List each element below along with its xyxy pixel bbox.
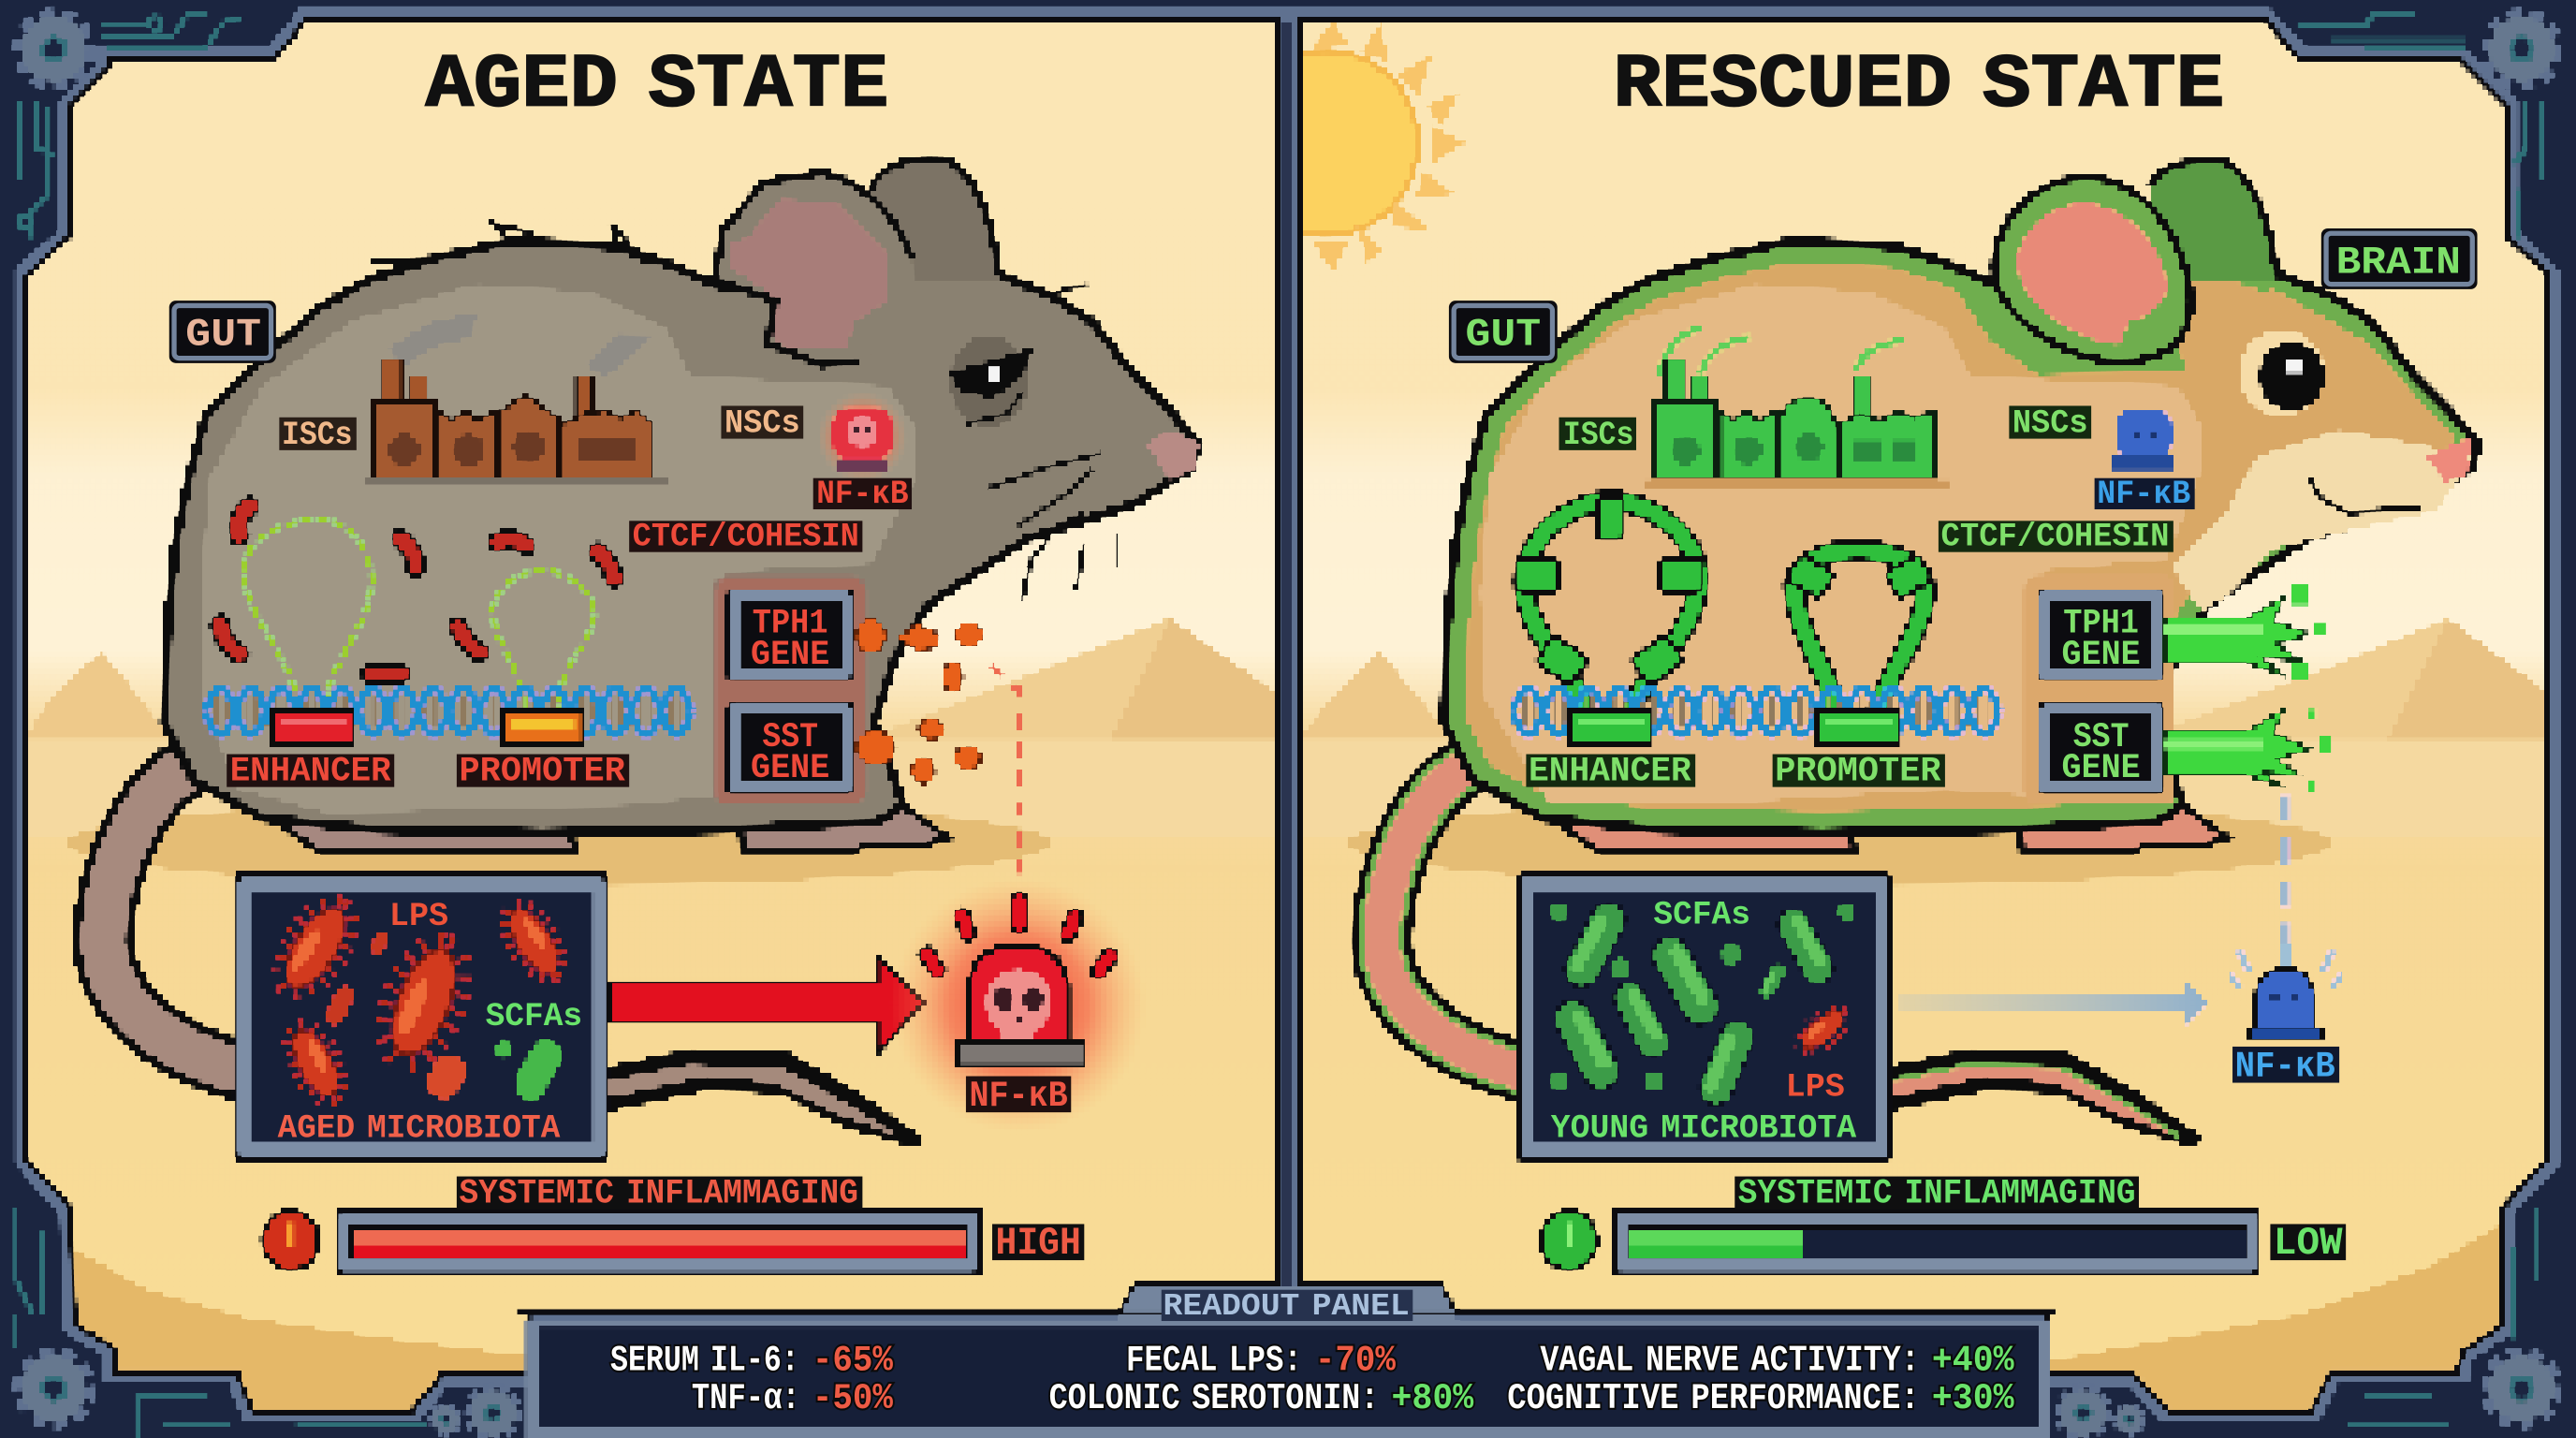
promoter block — [1817, 710, 1899, 744]
metric: TNF-alpha: TNF-α: — [692, 1378, 800, 1419]
inflammaging bar — [1612, 1208, 2261, 1277]
rescued state artwork — [1234, 0, 2576, 1438]
gut interior region — [1480, 285, 2203, 805]
label: TPH1 gene: TPH1 — [753, 605, 828, 644]
label: gut — [1449, 301, 1558, 363]
label: low: LOW — [2274, 1221, 2343, 1266]
feet — [230, 788, 948, 853]
label: NSCs: NSCs — [724, 405, 800, 443]
label: SCFAs: SCFAs — [1653, 896, 1750, 933]
dashed signal line — [2283, 795, 2288, 986]
nose and whiskers — [986, 431, 1199, 600]
label: enhancer: ENHANCER — [1529, 753, 1692, 792]
faded chromatin loops — [243, 520, 594, 707]
SST gene box — [2037, 701, 2165, 795]
enhancer block — [271, 710, 353, 744]
frame outline right — [1283, 23, 2544, 1408]
label: LPS: LPS — [389, 898, 448, 935]
label: TPH1 gene — [751, 605, 829, 675]
TPH1 gene box — [2037, 588, 2165, 682]
metric: colonic serotonin: COLONIC SEROTONIN: — [1049, 1378, 1379, 1419]
label: LPS: LPS — [1786, 1069, 1845, 1107]
nose — [2424, 437, 2471, 483]
young bacteria — [1548, 897, 1854, 1110]
rescued labels — [1449, 228, 2478, 1266]
eye — [948, 335, 1035, 427]
gut interior region — [200, 285, 916, 814]
label: alarm NF-kB: NF-κB — [2235, 1047, 2335, 1088]
faint arrow — [1899, 981, 2208, 1027]
readout metrics — [610, 1289, 2014, 1419]
panel: aged state — [0, 0, 1297, 1438]
factory cluster — [365, 312, 668, 486]
neck green patch — [1954, 289, 2185, 374]
cohesin knots — [1516, 496, 1933, 686]
label: ISCs: ISCs — [282, 417, 352, 454]
metric: TNF-alpha: -50% — [812, 1378, 894, 1419]
rescued title: RESCUED STATE — [1613, 43, 2224, 128]
label: SST gene: SST — [762, 718, 818, 757]
metric: vagal nerve activity: +40% — [1932, 1341, 2014, 1382]
metric: serum IL-6: -65% — [812, 1341, 894, 1382]
label: promoter: PROMOTER — [460, 753, 626, 792]
gene glow — [716, 579, 864, 805]
label: gut: GUT — [1465, 313, 1541, 358]
label: NSCs: NSCs — [2012, 405, 2088, 443]
factory cluster — [1643, 329, 1952, 488]
label: ISCs: ISCs — [1563, 417, 1633, 454]
weak output particles — [856, 620, 982, 784]
metric: TNF-alpha — [692, 1378, 894, 1419]
readout frame — [520, 1284, 2056, 1438]
label: enhancer: ENHANCER — [230, 753, 392, 792]
label: CTCF/cohesin: CTCF/COHESIN — [633, 519, 859, 556]
metric: cognitive performance: +30% — [1932, 1378, 2014, 1419]
mini alarm NF-kB — [818, 392, 907, 481]
label: mini NF-kB: NF-κB — [816, 476, 909, 513]
label: mini NF-kB: NF-κB — [2097, 476, 2190, 513]
tail — [103, 772, 243, 1071]
label: CTCF/cohesin: CTCF/COHESIN — [1941, 519, 2169, 556]
label: SST gene: SST — [2073, 718, 2129, 757]
aged labels — [169, 301, 1084, 1266]
label: brain — [2321, 228, 2478, 289]
metric: fecal LPS: -70% — [1315, 1341, 1397, 1382]
frame outline left — [30, 23, 1273, 1408]
strong output stream SST — [2165, 710, 2333, 790]
desert background with sun — [1303, 22, 2544, 1410]
label: brain: BRAIN — [2336, 240, 2461, 285]
aged title: AGED STATE — [426, 43, 888, 128]
microbiota box frame — [1516, 871, 1893, 1164]
DNA strand — [205, 688, 692, 734]
enhancer block — [1569, 710, 1651, 744]
dashed signal line — [990, 666, 1018, 874]
label: TPH1 gene: GENE — [751, 636, 829, 675]
label: young microbiota: YOUNG MICROBIOTA — [1551, 1109, 1857, 1147]
tail tip — [1880, 1049, 2203, 1149]
indicator light green — [1541, 1211, 1597, 1270]
gene backing — [711, 575, 868, 805]
indicator light red — [263, 1211, 318, 1270]
tail — [1382, 772, 1521, 1071]
near ear — [714, 172, 916, 365]
feet — [1510, 788, 2228, 853]
readout title: READOUT PANEL — [1164, 1289, 1410, 1325]
label: SST gene — [2062, 718, 2141, 788]
smile — [2310, 478, 2422, 513]
label: TPH1 gene: TPH1 — [2063, 605, 2139, 644]
TPH1 gene box — [726, 588, 855, 682]
near ear — [1994, 178, 2190, 361]
red arrow — [611, 956, 925, 1053]
aged bacteria — [271, 895, 570, 1106]
promoter block — [503, 710, 583, 744]
gene backing — [2024, 575, 2175, 805]
label: aged microbiota: AGED MICROBIOTA — [278, 1109, 561, 1147]
label: SCFAs: SCFAs — [486, 998, 582, 1035]
label: systemic inflammaging: SYSTEMIC INFLAMMAGING — [460, 1175, 858, 1214]
inflammaging bar — [335, 1208, 982, 1277]
tail tip — [600, 1049, 923, 1149]
label: SST gene — [751, 718, 829, 788]
readout panel — [520, 1284, 2056, 1438]
far ear — [2150, 160, 2276, 283]
eye — [2239, 330, 2324, 416]
mini alarm NF-kB blue — [2113, 409, 2175, 470]
label: gut — [169, 301, 276, 363]
label: TPH1 gene: GENE — [2062, 636, 2141, 675]
broken CTCF/cohesin fragments — [220, 506, 614, 674]
metric: cognitive performance: COGNITIVE PERFORMANCE: — [1507, 1378, 1920, 1419]
far ear — [871, 159, 999, 283]
label: systemic inflammaging: SYSTEMIC INFLAMMAGING — [1738, 1175, 2135, 1214]
restored chromatin loops — [1524, 501, 1925, 714]
mouse body — [165, 224, 1199, 833]
snout — [2172, 431, 2471, 611]
metric: serum IL-6: SERUM IL-6: — [610, 1341, 799, 1382]
desert background — [0, 0, 1297, 1438]
label: SST gene: GENE — [751, 749, 829, 788]
metric: fecal LPS: FECAL LPS: — [1126, 1341, 1302, 1382]
label: gut: GUT — [185, 313, 261, 358]
mouse body — [1444, 242, 2479, 833]
label: TPH1 gene — [2062, 605, 2141, 675]
label: alarm NF-kB: NF-κB — [969, 1076, 1068, 1117]
panel: rescued state — [1234, 0, 2576, 1438]
strong output stream TPH1 — [2165, 585, 2328, 681]
SST gene box — [726, 701, 855, 795]
label: SST gene: GENE — [2062, 749, 2141, 788]
microbiota box frame — [233, 871, 609, 1164]
label: high: HIGH — [996, 1221, 1081, 1266]
metric: vagal nerve activity: VAGAL NERVE ACTIVITY: — [1540, 1341, 1920, 1382]
metric: colonic serotonin: +80% — [1391, 1378, 1474, 1419]
NF-kB alarm blue — [2226, 945, 2346, 1040]
DNA strand — [1513, 688, 1999, 734]
label: promoter: PROMOTER — [1775, 753, 1941, 792]
aged state artwork — [0, 0, 1297, 1438]
NF-kB alarm red — [890, 877, 1147, 1134]
head tan — [2185, 289, 2454, 479]
